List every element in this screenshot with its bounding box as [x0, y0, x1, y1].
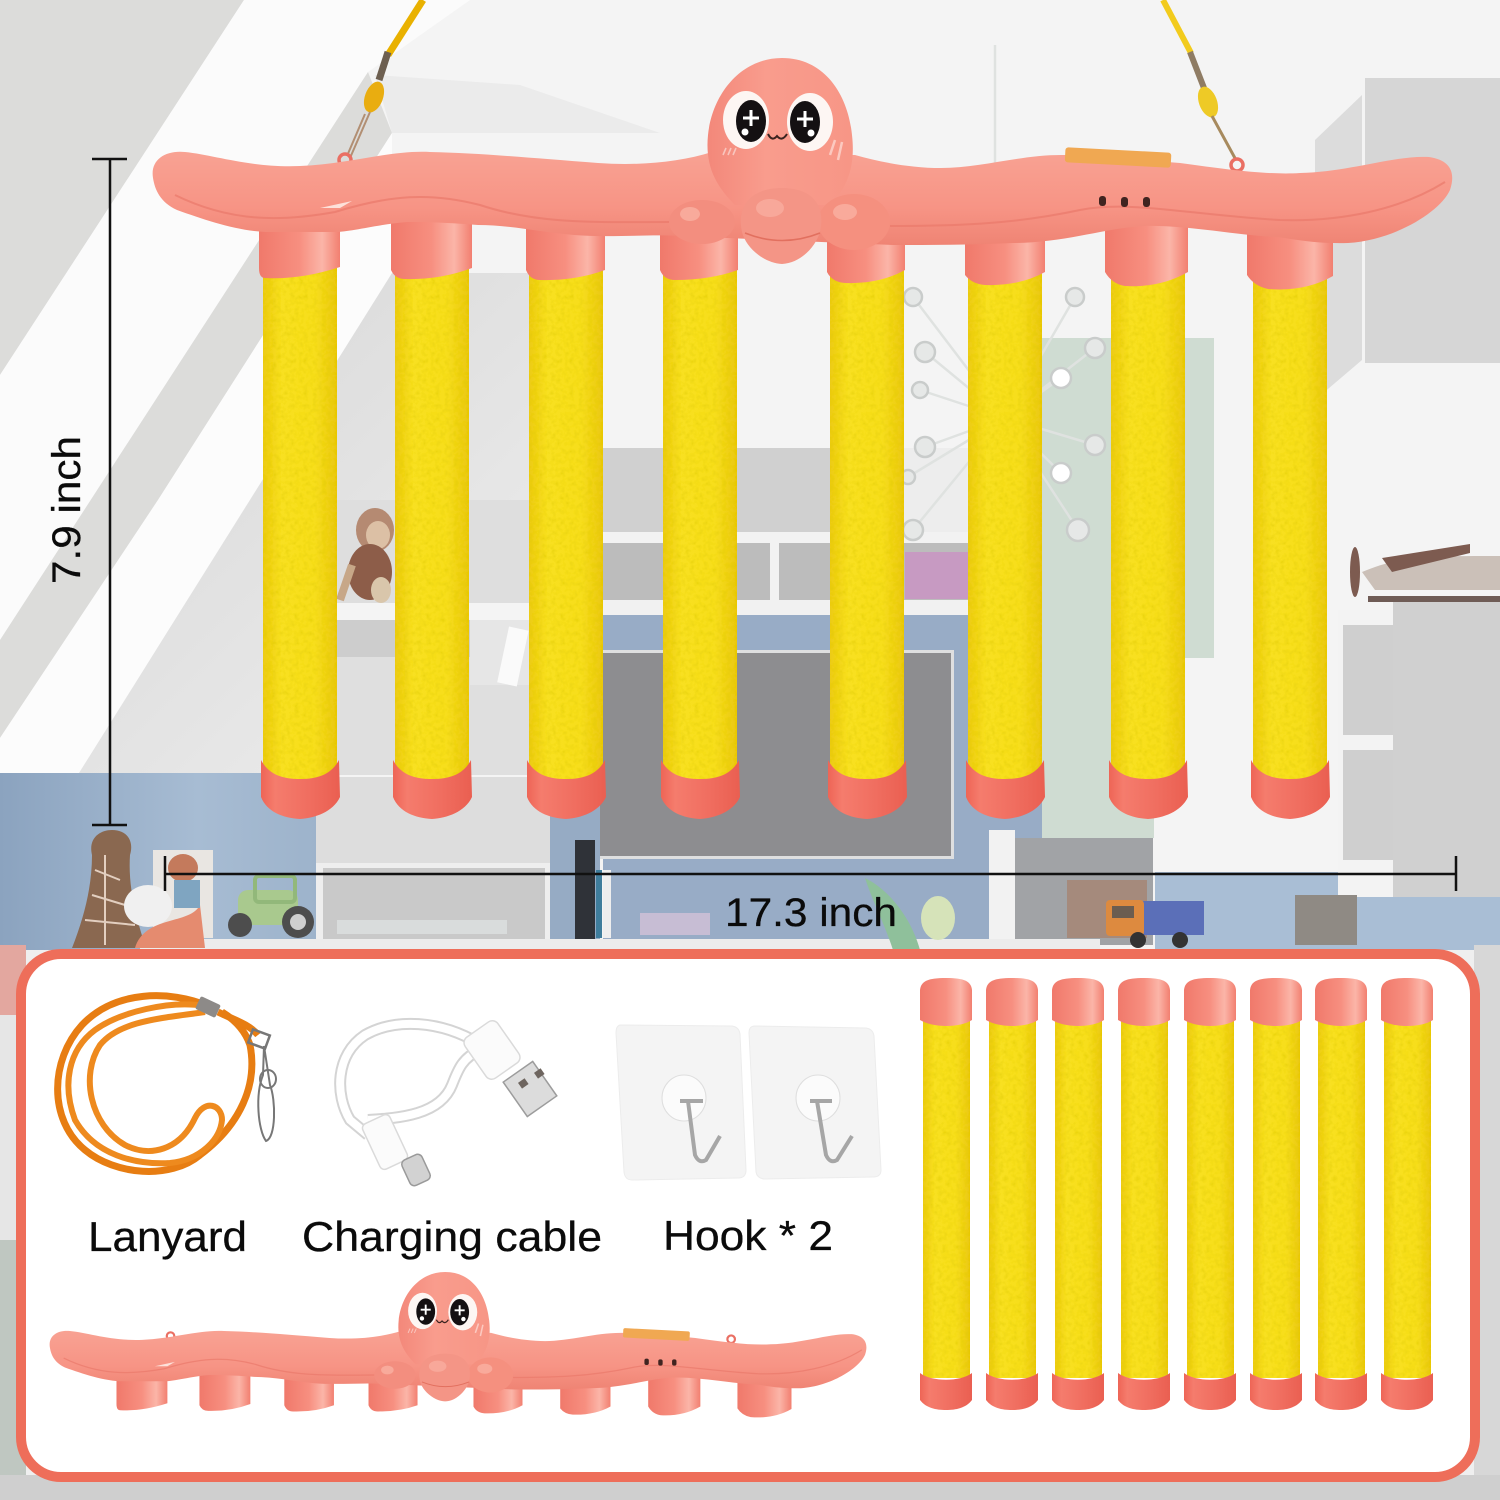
- chandelier: [901, 45, 1105, 541]
- toy figure and leaf: [865, 878, 955, 950]
- label: charging cable: Charging cable: [302, 1213, 602, 1260]
- centre wall and TV: [575, 448, 1043, 950]
- icon: charging cable: [340, 1018, 557, 1187]
- left-centre shelving: [336, 500, 600, 775]
- width label: 17.3 inch: [725, 891, 897, 935]
- shelf ledge above panel: [140, 939, 1100, 950]
- lanyard cord: left: [347, 0, 423, 158]
- octopus holder without rods: [50, 1272, 866, 1417]
- width dimension line: [165, 856, 1456, 891]
- panel: package contents: [21, 954, 1475, 1477]
- right shelving: [1154, 78, 1500, 950]
- label: hook count: Hook * 2: [663, 1212, 833, 1259]
- height label: 7.9 inch: [45, 436, 89, 584]
- monkey figurine: [340, 508, 394, 603]
- toy truck: [1106, 900, 1204, 948]
- ceiling diagonal light stripes: [0, 0, 660, 773]
- strips around contents panel: [0, 945, 1500, 1500]
- giraffe and desk toys: [72, 830, 213, 948]
- icon: orange lanyard: [58, 996, 276, 1171]
- toy tractor: [228, 876, 314, 938]
- icon: adhesive hooks: [616, 1025, 881, 1180]
- eight spare foam rods: [920, 978, 1433, 1410]
- height dimension line: [92, 158, 127, 825]
- label: lanyard: Lanyard: [88, 1213, 247, 1260]
- blue wall: [0, 773, 330, 950]
- pale green alcove: [1042, 338, 1214, 838]
- octopus holder: [153, 58, 1452, 289]
- toy airplane: [1350, 544, 1500, 602]
- lanyard cord: right: [1163, 0, 1236, 160]
- foam rods hanging from octopus: [261, 262, 1330, 819]
